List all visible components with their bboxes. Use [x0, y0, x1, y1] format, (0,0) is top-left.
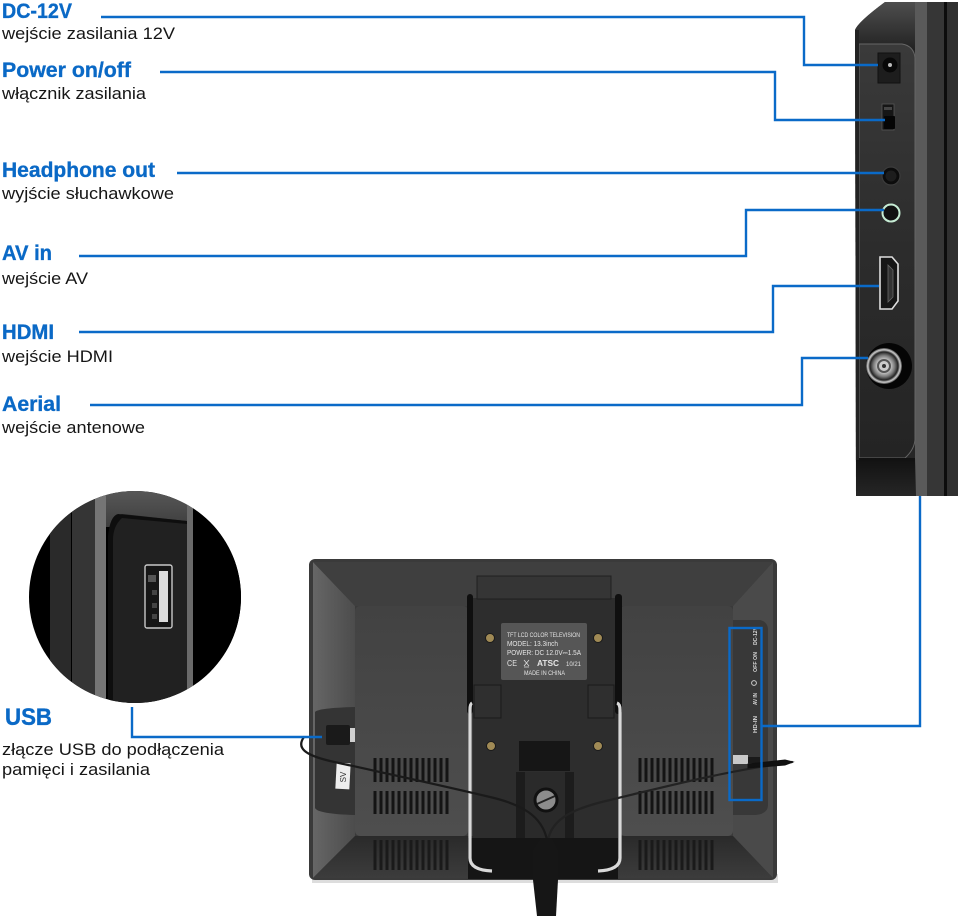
- stand straps: [467, 594, 622, 714]
- label plate: MODEL: 13.3inch: [507, 641, 558, 648]
- heading and text: aerial: Aerial: [2, 393, 61, 416]
- heading and text: aerial: [1, 393, 145, 437]
- centre bracket: [473, 598, 619, 838]
- lower dark band: [468, 838, 618, 879]
- label plate: MADE IN CHINA: [524, 670, 566, 677]
- metal stand wires: [470, 703, 620, 871]
- heading and text: USB: [2, 704, 225, 779]
- line: power switch: [160, 72, 885, 120]
- panel: rear view of TV: [301, 559, 793, 916]
- side markings: OFF ON: [753, 652, 759, 672]
- heading and text: power switch: włącznik zasilania: [1, 85, 147, 103]
- line: AV in: [79, 210, 884, 256]
- label plate: CE: [507, 659, 517, 668]
- heading and text: DC-12V: [1, 0, 175, 43]
- heading and text: headphone out: [1, 159, 174, 203]
- label plate: 10/21: [566, 661, 581, 668]
- icon: HDMI port: [880, 257, 898, 309]
- stand clamp with knob: [516, 741, 574, 838]
- left vents: [375, 758, 447, 814]
- heading and text: HDMI: wejście HDMI: [1, 348, 113, 366]
- aerial connector on rear: [733, 755, 760, 764]
- line: aerial: [90, 358, 868, 405]
- bracket side pads: [474, 685, 614, 718]
- right rear plate: [620, 606, 733, 836]
- heading and text: headphone out: wyjście słuchawkowe: [1, 185, 174, 203]
- heading and text: USB: pamięci i zasilania: [2, 761, 151, 779]
- heading and text: power switch: [1, 59, 147, 103]
- label plate: ATSC: [537, 659, 559, 668]
- heading and text: headphone out: Headphone out: [2, 159, 155, 182]
- cable tag: [335, 763, 351, 789]
- icon: power switch: [882, 104, 895, 130]
- heading and text: AV in: wejście AV: [1, 270, 88, 288]
- heading and text: AV in: [1, 242, 88, 288]
- line: HDMI: [79, 286, 879, 332]
- bracket top tab: [477, 576, 611, 599]
- heading and text: aerial: wejście antenowe: [1, 419, 145, 437]
- heading and text: HDMI: [1, 321, 113, 366]
- screws: [486, 634, 602, 750]
- large power plug: [533, 838, 558, 916]
- line: headphone out: [177, 172, 884, 174]
- heading and text: DC-12V: DC-12V: [2, 0, 72, 23]
- cables: [301, 737, 793, 840]
- bottom vents: [375, 840, 712, 870]
- icon: AV jack: [882, 204, 900, 222]
- line: side panel to rear view: [762, 496, 920, 726]
- side markings: HD-IN: [753, 716, 759, 733]
- icon: DC 12V socket: [878, 53, 900, 83]
- line: USB: [132, 707, 322, 737]
- heading and text: power switch: Power on/off: [2, 59, 132, 82]
- heading and text: HDMI: HDMI: [2, 321, 54, 344]
- heading and text: USB: USB: [5, 704, 52, 731]
- side markings: [752, 627, 759, 733]
- side markings: AV IN: [753, 693, 759, 705]
- heading and text: USB: złącze USB do podłączenia: [2, 741, 225, 759]
- label plate: POWER: DC 12.0V⎓1.5A: [507, 650, 581, 657]
- USB plug: [326, 725, 355, 745]
- icon: aerial connector: [866, 343, 912, 389]
- highlight box: port area on rear view: [730, 628, 762, 800]
- left rear plate: [355, 606, 468, 836]
- side markings: DC-12V: [753, 627, 759, 645]
- left side bump with USB: [315, 707, 355, 815]
- icon: USB port: [145, 565, 172, 628]
- icon: headphone jack: [882, 167, 900, 185]
- line: DC-12V: [101, 17, 878, 65]
- panel: side view of TV with ports: [855, 0, 960, 496]
- right side bump with port markings: [733, 620, 768, 815]
- label plate: TFT LCD COLOR TELEVISION: [507, 632, 580, 639]
- callout lines: [79, 17, 920, 800]
- heading and text: DC-12V: wejście zasilania 12V: [1, 25, 175, 43]
- heading and text: AV in: AV in: [2, 242, 52, 265]
- label plate: [501, 623, 587, 680]
- panel: circular USB port close-up: [29, 487, 241, 707]
- right vents: [640, 758, 712, 814]
- cable tag: SV: [339, 771, 348, 782]
